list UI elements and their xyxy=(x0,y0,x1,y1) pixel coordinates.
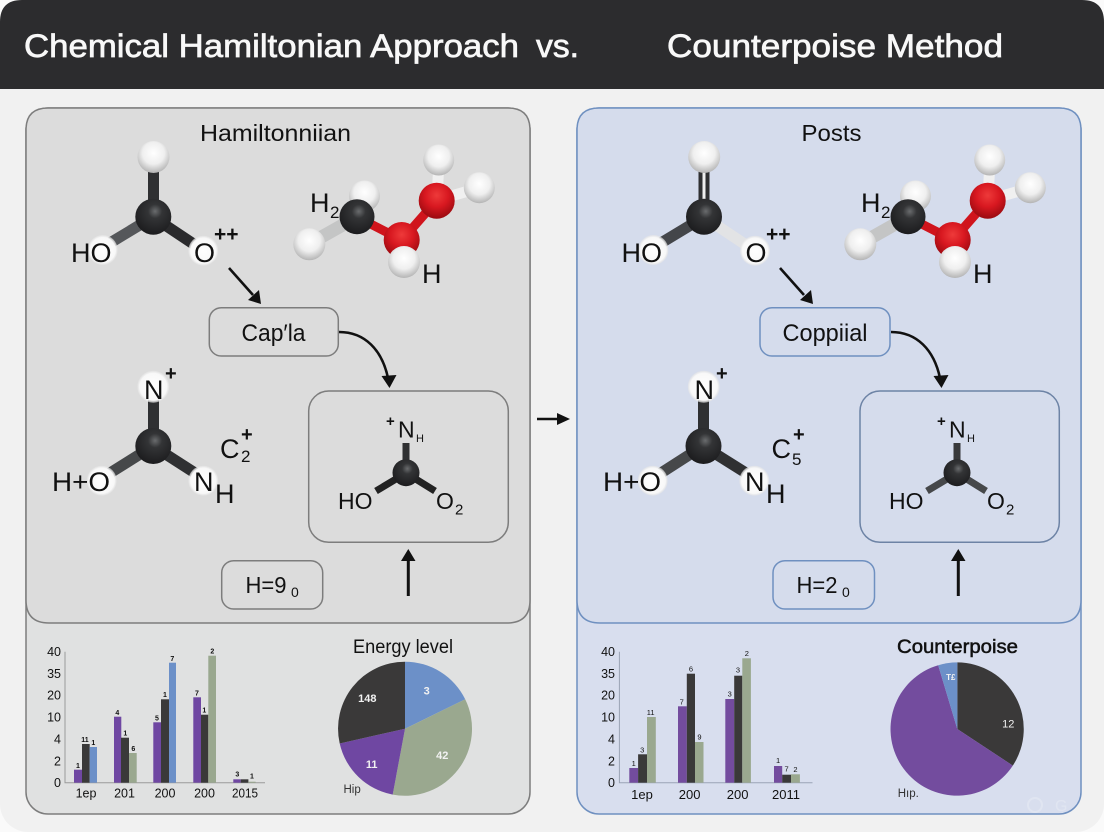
box: result molecule: + xyxy=(937,413,946,430)
molecule: top left: O xyxy=(746,238,767,268)
bar value labels: 2 xyxy=(745,649,749,658)
x axis labels: 1ep xyxy=(76,786,96,800)
y axis labels: 2 xyxy=(54,754,61,768)
molecule: lower left: N xyxy=(194,467,214,497)
molecule: top left: O xyxy=(194,238,215,268)
bar value labels: 3 xyxy=(728,690,732,698)
box: result molecule xyxy=(860,391,1059,542)
x axis labels: 200 xyxy=(727,787,748,802)
molecule: lower left: C xyxy=(220,434,240,464)
molecule: lower left: H+O xyxy=(52,467,110,497)
panel heading: Posts xyxy=(802,120,862,146)
molecule: lower left: 2 xyxy=(241,447,250,466)
molecule: top right: H xyxy=(310,188,330,218)
molecule: lower left: H+O xyxy=(603,467,661,497)
watermark xyxy=(1028,798,1067,815)
arrow: up to result box xyxy=(951,549,966,596)
bar value labels: 6 xyxy=(131,746,135,753)
bar value labels: 3 xyxy=(235,772,239,778)
bar value labels: 9 xyxy=(697,732,701,742)
box: result molecule: O xyxy=(987,488,1005,514)
molecule: lower left: N xyxy=(745,467,764,497)
y axis labels: 0 xyxy=(608,776,615,790)
pie chart: Energy level: 42 xyxy=(436,750,448,762)
molecule: lower left: N xyxy=(694,375,714,405)
bar value labels: 1 xyxy=(250,774,254,780)
arrow: curved to result box xyxy=(339,332,396,388)
molecule: lower left: + xyxy=(241,424,253,446)
box: result molecule: H xyxy=(967,433,975,445)
molecule: lower left: N xyxy=(144,375,164,405)
bar value labels: 7 xyxy=(195,690,199,698)
title: vs: vs. xyxy=(536,28,579,64)
bar value labels: 3 xyxy=(640,746,644,754)
arrow: up to result box xyxy=(401,549,416,596)
molecule: top right: 2 xyxy=(330,203,339,222)
bar value labels: 1 xyxy=(202,708,206,714)
y axis labels: 10 xyxy=(47,710,61,724)
y axis labels: 40 xyxy=(47,645,61,659)
molecule: lower left: 5 xyxy=(792,450,801,469)
bar value labels: 6 xyxy=(689,664,693,674)
bar value labels: 7 xyxy=(170,656,174,663)
box: result molecule xyxy=(309,391,508,542)
pie chart: Energy level: Hip xyxy=(344,784,361,796)
box: result molecule: N xyxy=(949,416,966,442)
title bar xyxy=(0,0,1104,89)
molecule: top right xyxy=(293,144,495,289)
x axis labels: 1ep xyxy=(631,787,653,802)
y axis labels: 4 xyxy=(608,732,615,746)
pie chart: Energy level xyxy=(338,637,472,796)
molecule: lower left: H xyxy=(215,479,234,509)
bar value labels: 4 xyxy=(115,710,119,717)
box: result molecule: 2 xyxy=(1006,502,1014,518)
box: Cap'la: Cap′la xyxy=(242,320,306,347)
molecule: top left: ++ xyxy=(766,223,791,246)
molecule: top left xyxy=(71,141,239,268)
box: result molecule: HO xyxy=(889,488,924,514)
molecule: lower left: H xyxy=(766,479,786,509)
bar chart: left xyxy=(47,645,265,800)
panel heading: Hamiltonniian xyxy=(200,120,351,146)
y axis labels: 35 xyxy=(47,667,61,681)
box: Coppiial xyxy=(760,308,890,356)
molecule: top right: H xyxy=(861,188,880,218)
pie chart: Counterpoise: 12 xyxy=(1002,718,1014,730)
box: H=9: H=9 xyxy=(246,572,286,598)
title: left method: Chemical Hamiltonian Approach xyxy=(24,28,519,64)
pie chart: Counterpoise: Hıp. xyxy=(898,788,919,800)
bar value labels xyxy=(632,649,798,774)
y axis labels: 4 xyxy=(54,732,61,746)
y axis labels: 40 xyxy=(601,645,615,659)
bar value labels: 5 xyxy=(155,716,159,722)
y axis labels xyxy=(601,645,615,790)
molecule: top right: H xyxy=(422,259,442,289)
x axis labels: 2011 xyxy=(772,787,800,802)
molecule: top left: ++ xyxy=(214,223,239,246)
bars xyxy=(629,699,782,783)
bar value labels: 7 xyxy=(680,698,684,706)
arrow: molecule to box xyxy=(780,268,813,304)
x axis labels xyxy=(631,787,800,802)
panel: Hamiltonian xyxy=(26,108,530,814)
molecule: top right: H xyxy=(973,259,992,289)
molecule: lower left xyxy=(603,363,805,509)
bar value labels: 1 xyxy=(76,763,80,770)
x axis labels: 200 xyxy=(679,787,700,802)
bar value labels: 11 xyxy=(647,708,655,717)
x axis labels: 201 xyxy=(114,786,135,800)
box: result molecule: + xyxy=(386,413,395,430)
box: result molecule: 2 xyxy=(455,502,463,518)
x axis labels: 2015 xyxy=(232,786,258,800)
pie chart: Counterpoise xyxy=(891,637,1024,800)
box: Cap'la xyxy=(209,308,338,356)
molecule: lower left: C xyxy=(772,434,791,464)
pie chart: Energy level: 148 xyxy=(358,693,376,705)
bar chart: right xyxy=(601,645,812,802)
box: result molecule: N xyxy=(398,416,415,442)
bar value labels: 11 xyxy=(81,737,89,744)
box: H=2 xyxy=(773,561,874,609)
bar value labels: 1 xyxy=(163,692,167,699)
molecule: top left: HO xyxy=(71,238,112,268)
box: result molecule: HO xyxy=(338,488,372,514)
molecule: top right: 2 xyxy=(881,203,890,222)
arrow: curved to result box xyxy=(891,332,948,388)
box: result molecule: O xyxy=(436,488,454,514)
pie chart: Counterpoise: T£ xyxy=(946,673,956,682)
box: Coppiial: Coppiial xyxy=(782,320,868,347)
bars xyxy=(74,697,241,783)
y axis labels: 2 xyxy=(608,754,615,768)
y axis labels: 35 xyxy=(601,667,615,681)
molecule: lower left: + xyxy=(793,424,805,446)
watermark: G xyxy=(1055,798,1067,815)
box: H=2: 0 xyxy=(842,584,850,600)
bar value labels: 3 xyxy=(736,666,740,674)
pie chart: Energy level: 11 xyxy=(366,759,378,771)
molecule: lower left: + xyxy=(165,363,177,385)
molecule: top left: HO xyxy=(622,238,662,268)
molecule: lower left xyxy=(52,363,253,509)
molecule: top left xyxy=(622,141,791,268)
molecule: top right xyxy=(844,144,1046,289)
y axis labels: 0 xyxy=(54,776,61,790)
arrow: between panels xyxy=(537,413,570,425)
x axis labels: 200 xyxy=(194,786,215,800)
bar value labels xyxy=(76,648,254,780)
y axis labels xyxy=(47,645,61,790)
y axis labels: 20 xyxy=(601,688,615,702)
box: result molecule: H xyxy=(416,433,424,445)
x axis labels xyxy=(76,786,258,800)
bar value labels: 2 xyxy=(210,648,214,656)
panel: Counterpoise xyxy=(577,108,1081,814)
bar value labels: 7 xyxy=(785,764,789,774)
y axis labels: 10 xyxy=(601,710,615,724)
x axis labels: 200 xyxy=(155,786,175,800)
arrow: molecule to box xyxy=(229,268,261,304)
box: H=9 xyxy=(222,561,323,609)
pie heading: Energy level xyxy=(353,637,453,658)
bar value labels: 1 xyxy=(632,759,636,768)
box: H=9: 0 xyxy=(291,584,299,600)
box: H=2: H=2 xyxy=(796,572,838,598)
bar value labels: 2 xyxy=(793,765,798,774)
bar value labels: 1 xyxy=(91,740,95,747)
pie heading: Counterpoise xyxy=(897,637,1018,658)
bar value labels: 1 xyxy=(123,730,127,738)
pie chart: Energy level: 3 xyxy=(424,686,430,698)
bar value labels: 1 xyxy=(776,756,780,765)
y axis labels: 20 xyxy=(47,688,61,702)
molecule: lower left: + xyxy=(716,363,728,385)
title: right method: Counterpoise Method xyxy=(667,28,1003,64)
